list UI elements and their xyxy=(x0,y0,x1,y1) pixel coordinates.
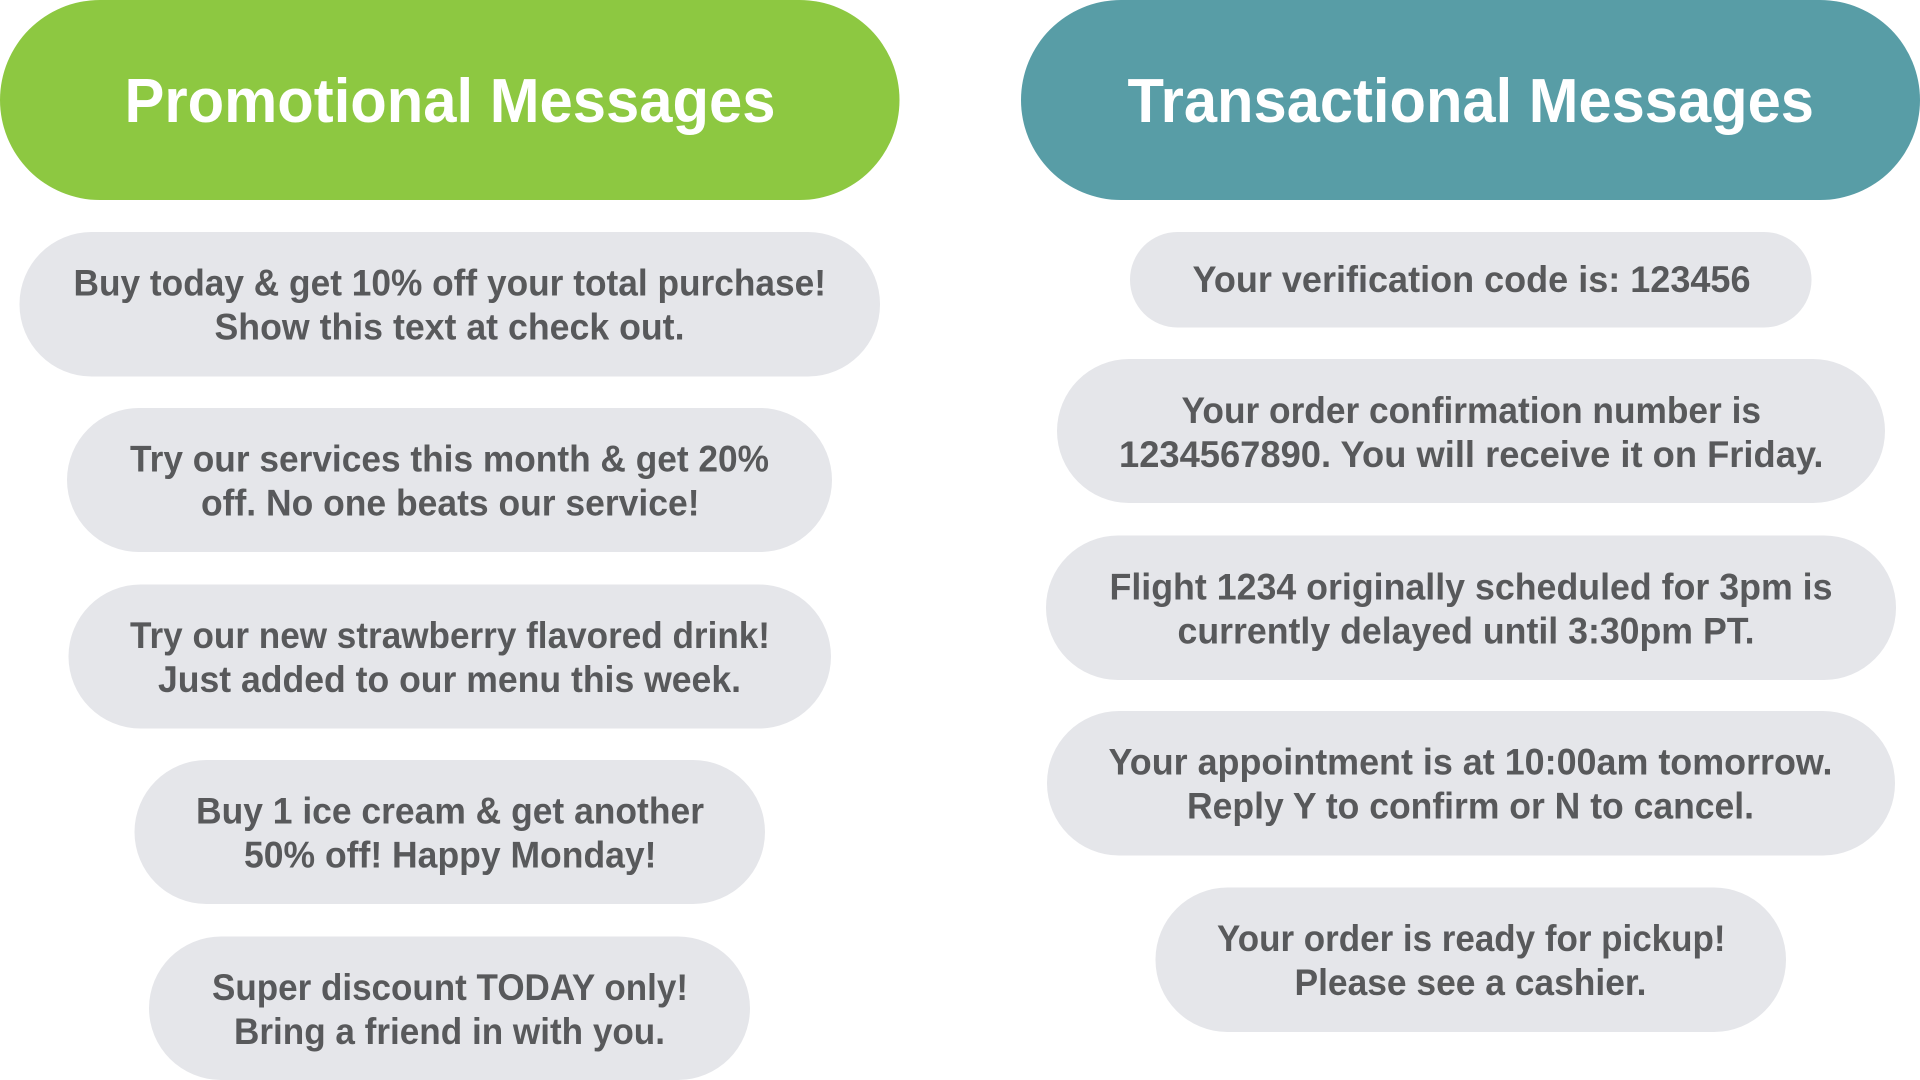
message bubble: ice cream: Buy 1 ice cream & get another xyxy=(196,790,704,832)
message bubble: ice cream: 50% off! Happy Monday! xyxy=(244,834,656,876)
message bubble: 10% off purchase xyxy=(20,232,880,376)
message bubble: services 20% off xyxy=(67,408,832,552)
message bubble: services 20% off: Try our services this month & get 20% xyxy=(130,438,769,480)
message bubble: super discount: Super discount TODAY only! xyxy=(212,967,688,1008)
message bubble: appointment xyxy=(1047,711,1895,856)
message bubble: flight delay xyxy=(1046,536,1896,680)
message bubble: strawberry drink: Try our new strawberry flavored drink! xyxy=(130,615,770,656)
message bubble: super discount: Bring a friend in with you. xyxy=(234,1011,665,1052)
message bubble: services 20% off: off. No one beats our service! xyxy=(201,482,700,524)
message bubble: order ready xyxy=(1156,888,1786,1032)
message bubble: ice cream xyxy=(134,760,765,904)
message bubble: appointment: Reply Y to confirm or N to cancel. xyxy=(1187,786,1754,827)
heading: Transactional Messages: Transactional Messages xyxy=(1128,67,1814,136)
heading: Promotional Messages: Promotional Messages xyxy=(124,67,776,136)
message bubble: flight delay: Flight 1234 originally scheduled for 3pm is xyxy=(1110,566,1832,607)
message bubble: order confirmation xyxy=(1057,359,1885,503)
message bubble: order ready: Please see a cashier. xyxy=(1294,962,1646,1003)
message bubble: strawberry drink xyxy=(68,584,831,728)
heading: Transactional Messages xyxy=(1021,0,1920,200)
panel: promotional messages column xyxy=(0,0,900,1080)
panel: transactional messages column xyxy=(1021,0,1920,1032)
message bubble: order confirmation: Your order confirmation number is xyxy=(1182,390,1761,431)
message bubble: strawberry drink: Just added to our menu this week. xyxy=(158,659,741,700)
message bubble: order ready: Your order is ready for pickup! xyxy=(1217,918,1726,959)
message bubble: 10% off purchase: Buy today & get 10% off your total purchase! xyxy=(74,262,826,304)
message bubble: 10% off purchase: Show this text at check out. xyxy=(214,307,684,348)
message bubble: order confirmation: 1234567890. You will receive it on Friday. xyxy=(1119,434,1824,475)
message bubble: super discount xyxy=(149,936,750,1080)
message bubble: flight delay: currently delayed until 3:30pm PT. xyxy=(1178,610,1754,651)
heading: Promotional Messages xyxy=(0,0,900,200)
message bubble: appointment: Your appointment is at 10:00am tomorrow. xyxy=(1108,742,1832,782)
message bubble: verification code: Your verification code is: 123456 xyxy=(1192,259,1750,300)
message bubble: verification code xyxy=(1130,232,1812,328)
